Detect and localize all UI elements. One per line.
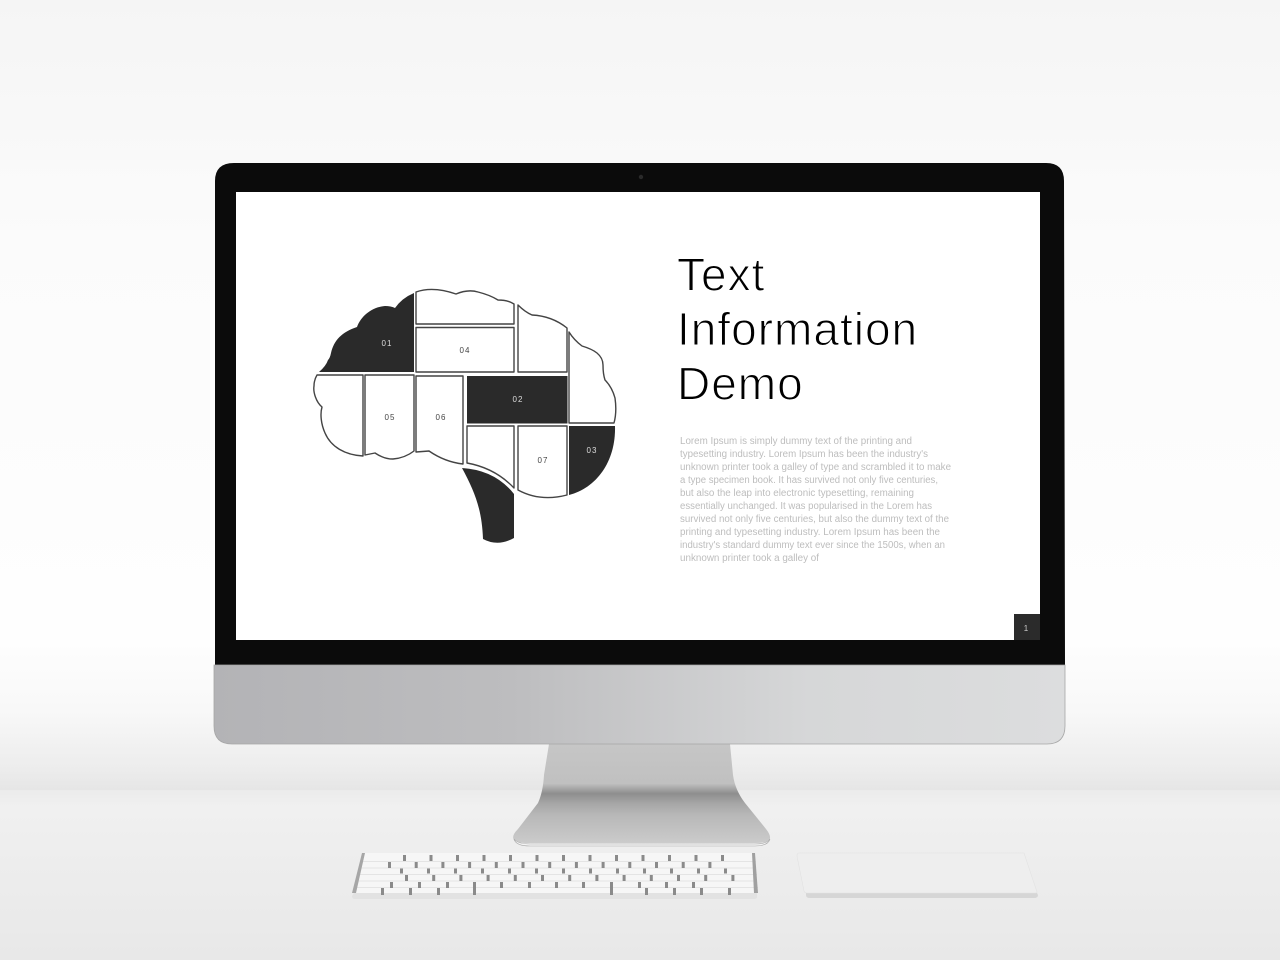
brain lobe: left bbox=[314, 375, 363, 456]
body text: survived not only five centuries, but also the dummy text of the bbox=[680, 514, 949, 525]
brain lobe 02 bbox=[467, 376, 568, 424]
title bbox=[677, 248, 918, 410]
brain lobe 06 bbox=[416, 376, 463, 464]
title: Demo bbox=[677, 358, 804, 410]
page number: 1 bbox=[1024, 624, 1029, 633]
brain lobe 01: 01 bbox=[382, 339, 392, 348]
body text: unknown printer took a galley of bbox=[680, 553, 819, 564]
brain lobe 01 bbox=[319, 293, 414, 372]
body text: printing and typesetting industry. Lorem Ipsum has been the bbox=[680, 527, 940, 538]
slide screen bbox=[236, 192, 1040, 640]
webcam bbox=[639, 175, 643, 179]
brain lobe: top bbox=[416, 289, 514, 324]
page number bbox=[1014, 614, 1040, 640]
body text: Lorem Ipsum is simply dummy text of the printing and bbox=[680, 436, 912, 447]
title: Text bbox=[677, 248, 765, 300]
monitor chin bbox=[214, 665, 1065, 744]
brain diagram bbox=[314, 289, 616, 543]
title: Information bbox=[677, 303, 918, 355]
monitor bbox=[214, 163, 1065, 744]
brain lobe 07 bbox=[518, 426, 567, 498]
brain lobe 03: 03 bbox=[587, 446, 597, 455]
brain lobe 06: 06 bbox=[436, 413, 446, 422]
brain lobe: lower centre bbox=[467, 426, 514, 488]
body text: unknown printer took a galley of type and scrambled it to make bbox=[680, 462, 951, 473]
body text: but also the leap into electronic typesetting, remaining bbox=[680, 488, 914, 499]
body text: industry's standard dummy text ever since the 1500s, when an bbox=[680, 540, 945, 551]
brain lobe 03 bbox=[569, 426, 615, 495]
brain lobe 07: 07 bbox=[538, 456, 548, 465]
brain lobe 05: 05 bbox=[385, 413, 395, 422]
brain stem bbox=[462, 468, 514, 543]
brain lobe: far right bbox=[569, 332, 616, 423]
brain lobe 05 bbox=[365, 375, 414, 459]
body text: typesetting industry. Lorem Ipsum has been the industry's bbox=[680, 449, 928, 460]
monitor stand bbox=[513, 744, 770, 846]
body text: essentially unchanged. It was popularised in the Lorem has bbox=[680, 501, 932, 512]
brain lobe: upper right bbox=[518, 305, 567, 372]
brain lobe 04 bbox=[416, 328, 514, 372]
trackpad bbox=[797, 853, 1038, 898]
brain lobe 02: 02 bbox=[513, 395, 523, 404]
keyboard bbox=[352, 853, 758, 899]
body text: a type specimen book. It has survived not only five centuries, bbox=[680, 475, 938, 486]
monitor bezel bbox=[215, 163, 1065, 665]
body text bbox=[680, 436, 951, 564]
brain lobe 04: 04 bbox=[460, 346, 470, 355]
